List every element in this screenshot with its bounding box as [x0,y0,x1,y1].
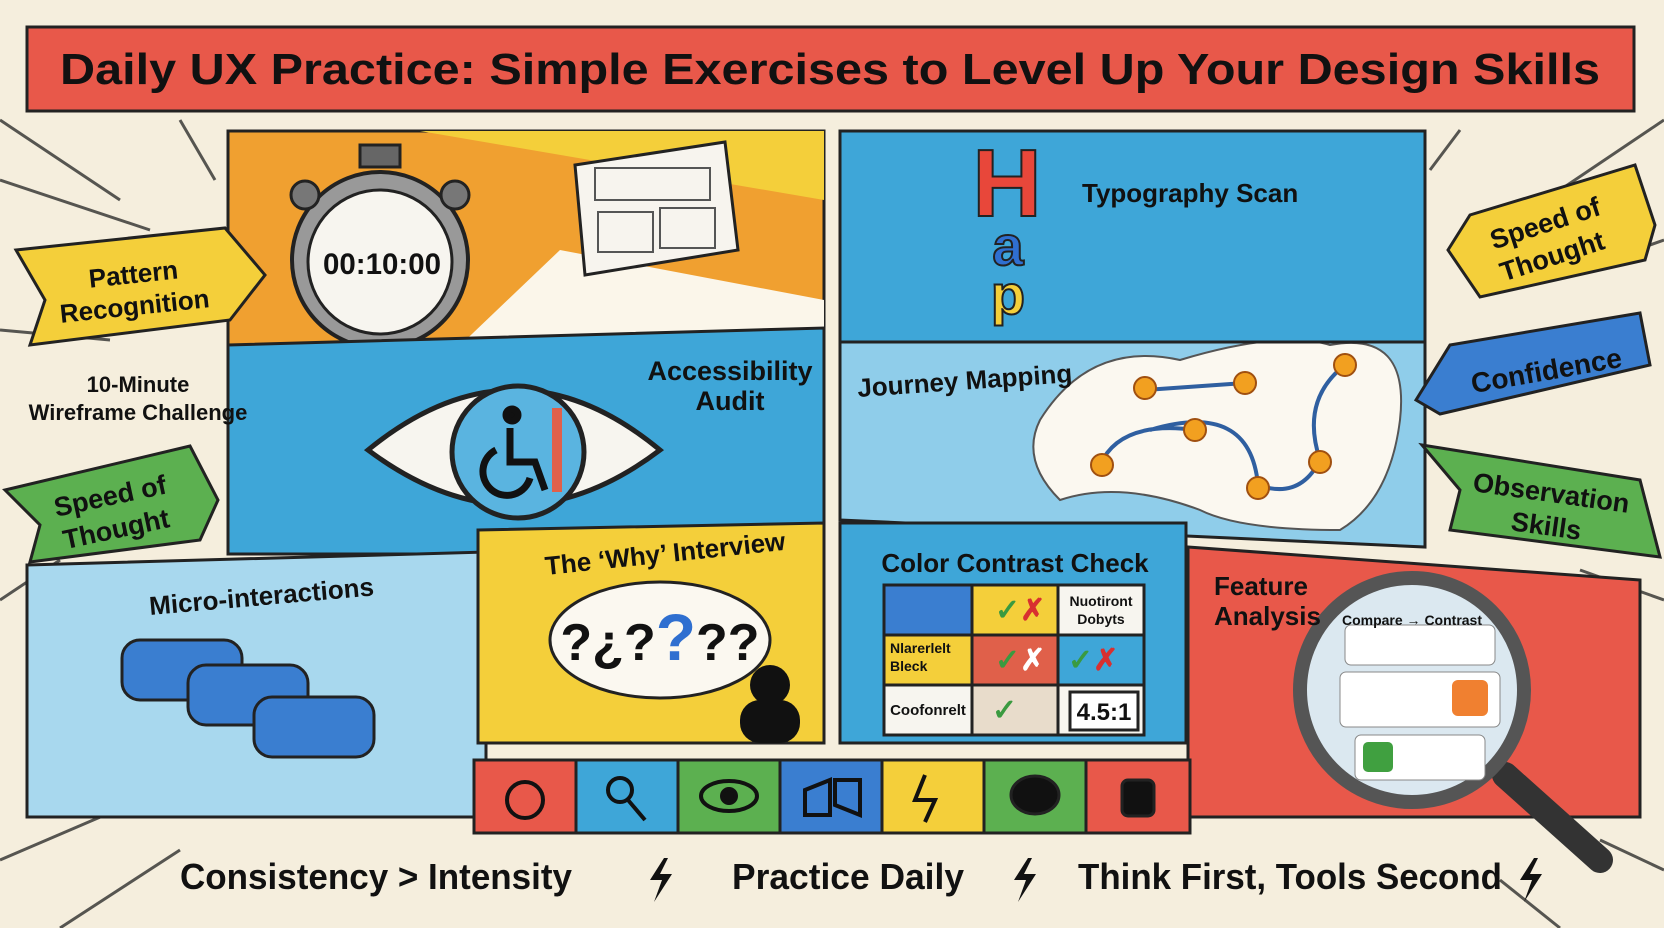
label: 10-minute wireframe challenge: 10-Minute [87,372,189,397]
icon: letters Hap: a [992,214,1024,277]
heading: The ‘Why’ Interview [543,526,787,581]
icon: letters Hap: p [991,263,1025,326]
side tag: observation skills: Skills [1509,506,1583,546]
footer slogans [180,856,1542,902]
panel: journey mapping [840,324,1425,547]
panel: why interview [478,523,824,743]
panel: micro-interactions [27,552,486,817]
side tag: confidence: Confidence [1469,342,1624,399]
heading [1214,571,1321,631]
side tag: confidence [1416,313,1650,414]
side tag: speed of thought right: Thought [1496,225,1608,287]
side tag: pattern recognition [16,228,265,345]
panel: color contrast check: 4.5:1 [1077,699,1131,726]
panel: color contrast check: Nlarerlelt [890,640,951,656]
side tag: speed of thought right: Speed of [1486,191,1605,255]
table [884,585,1144,735]
icon: wireframe sheet [575,142,738,275]
heading: Color Contrast Check [881,548,1149,578]
icon: letters Hap [972,130,1042,326]
panel: color contrast check: ✓✗ [1068,644,1118,677]
panel: typography scan [840,130,1425,342]
heading: accessibility audit: Audit [696,386,764,416]
icon: eye with wheelchair [368,386,660,518]
side tag: speed of thought right [1448,165,1655,297]
panel: color contrast check: Dobyts [1077,611,1125,627]
heading: Feature [1214,571,1308,601]
footer slogans: Practice Daily [732,856,964,897]
icon: stopwatch [291,145,469,348]
icon strip [474,760,1190,833]
heading: typography scan: Typography Scan [1082,178,1298,208]
label: 10-minute wireframe challenge [29,372,247,425]
icon: magnifier [1300,578,1600,860]
side tag: pattern recognition: Recognition [58,283,211,329]
side tag: pattern recognition: Pattern [87,254,179,294]
panel: accessibility audit [228,328,824,554]
footer slogans: Think First, Tools Second [1078,856,1502,897]
icon: letters Hap: H [972,130,1042,237]
side tag: speed of thought left: Thought [60,503,172,555]
panel: color contrast check: ✓✗ [995,594,1045,627]
label: 10-minute wireframe challenge: Wireframe Challenge [29,400,247,425]
map [1033,340,1401,530]
heading: accessibility audit: Accessibility [647,356,813,386]
heading: Micro-interactions [148,571,375,621]
heading: journey mapping: Journey Mapping [856,358,1073,403]
side tag: speed of thought left [5,446,218,562]
panel: 10-minute wireframe stopwatch [228,131,824,355]
panel: color contrast check: ✓✗ [995,644,1045,677]
panel: color contrast check: Coofonrelt [890,702,966,719]
side tag: observation skills [1422,445,1660,557]
icon: speech bubble: ?¿???? [560,600,760,674]
panel: color contrast check: Nuotiront [1070,593,1133,609]
heading: Analysis [1214,601,1321,631]
side tag: observation skills: Observation [1471,467,1631,519]
panel: color contrast check: Bleck [890,658,928,674]
icon: magnifier: Compare → Contrast [1342,612,1482,628]
panel: color contrast check [840,523,1186,743]
footer slogans: Consistency > Intensity [180,856,572,897]
side tag: speed of thought left: Speed of [51,469,170,523]
icon: buttons [122,640,374,757]
icon: stopwatch: 00:10:00 [323,248,441,281]
title [27,27,1634,111]
icon: speech bubble [550,582,770,698]
panel: feature analysis [1188,547,1640,860]
heading: accessibility audit [647,356,813,416]
title: Daily UX Practice: Simple Exercises to Level Up Your Design Skills [60,45,1600,94]
icon: silhouette [740,665,800,743]
panel: color contrast check: ✓ [992,694,1017,727]
